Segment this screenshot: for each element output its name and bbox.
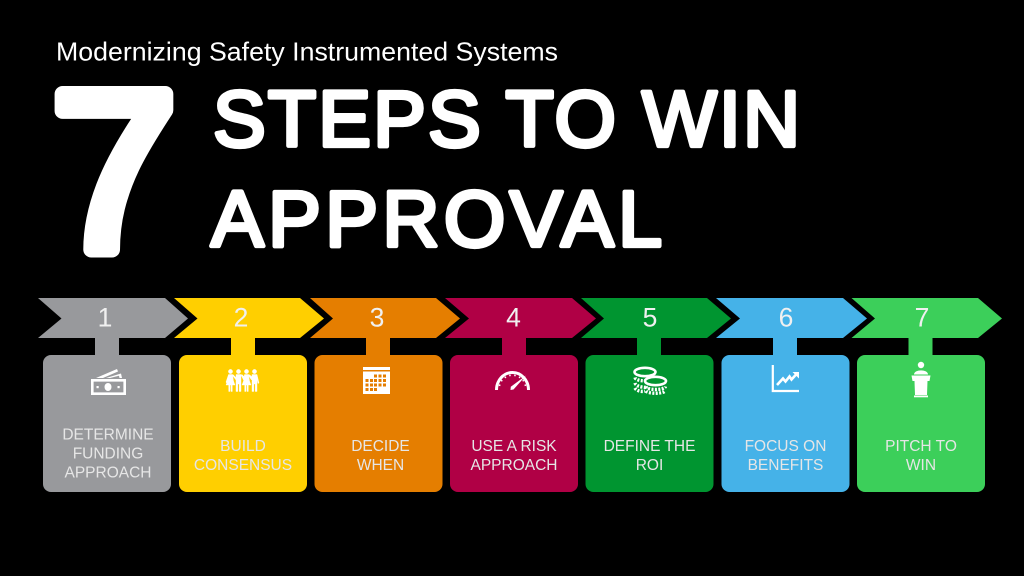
headline [211,74,800,263]
step 6: focus on benefits: FOCUS ON [745,438,826,455]
step 1: determine funding approach [38,298,188,492]
step 2: build consensus: CONSENSUS [194,457,292,474]
step 3: decide when: DECIDE [351,438,410,455]
step 1: determine funding approach: 1 [98,302,112,332]
step 5: define the roi: 5 [643,302,657,332]
step 5: define the roi: ROI [636,457,663,474]
step 6: focus on benefits: BENEFITS [748,457,823,474]
step 3: decide when: WHEN [357,457,404,474]
icon: banknotes [92,369,125,394]
big numeral 7: 7 [51,44,177,298]
step 2: build consensus: BUILD [220,438,266,455]
step 2: build consensus: 2 [234,302,248,332]
step 3: decide when: 3 [370,302,384,332]
step 7: pitch to win: WIN [906,457,936,474]
subtitle: Modernizing Safety Instrumented Systems [56,38,558,66]
step 4: use a risk approach: APPROACH [470,457,558,474]
step 1: determine funding approach: FUNDING [73,446,143,462]
step 5: define the roi [581,298,731,492]
step 3: decide when [310,298,460,492]
step 6: focus on benefits: 6 [779,302,793,332]
step 4: use a risk approach: 4 [506,302,521,332]
step 7: pitch to win: 7 [915,302,929,332]
step 1: determine funding approach: APPROACH [64,464,152,482]
step 4: use a risk approach [445,298,596,492]
icon: speedometer gauge [496,372,528,390]
icon: coin stacks [634,368,666,393]
icon: group of people [226,369,259,392]
headline: STEPS TO WIN [213,74,800,163]
step 6: focus on benefits [716,298,867,492]
step 7: pitch to win [852,298,1002,492]
icon: calendar [363,367,390,394]
step 7: pitch to win: PITCH TO [885,438,957,455]
step 4: use a risk approach: USE A RISK [471,438,557,455]
step 5: define the roi: DEFINE THE [604,438,695,455]
icon: line chart [773,365,799,391]
icon: speaker at podium [912,362,930,397]
step 1: determine funding approach: DETERMINE [62,426,154,444]
headline: APPROVAL [211,174,662,263]
step 2: build consensus [174,298,324,492]
